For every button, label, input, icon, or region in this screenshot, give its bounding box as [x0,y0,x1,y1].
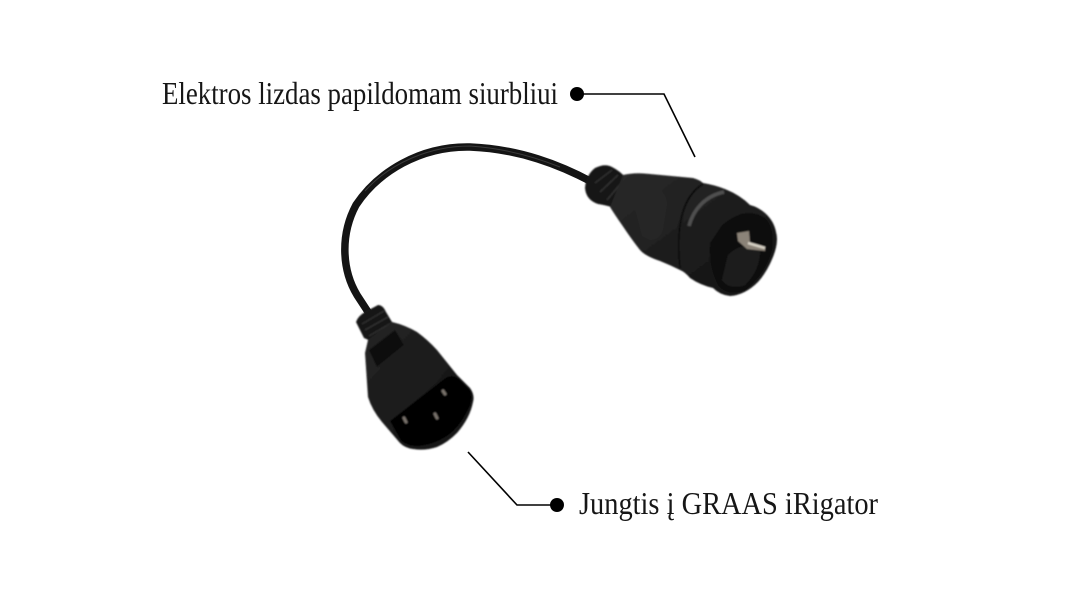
plug face [390,376,472,446]
socket side panel [630,187,667,240]
plug body [365,322,474,450]
plug strain relief [356,305,392,343]
socket strain relief ribs [595,170,622,200]
callout: socket [162,75,695,157]
callout leader: plug [468,452,557,505]
plug connector [356,305,474,450]
callout text: plug: Jungtis į GRAAS iRigator [579,485,878,521]
plug strain relief ribs [362,311,391,336]
plug label recess [369,330,404,367]
callout text: socket: Elektros lizdas papildomam siurbliui [162,75,558,111]
plug pins [404,391,445,422]
socket metal contact [737,231,765,251]
callout marker: socket [570,87,584,101]
socket collar highlight [689,192,724,226]
socket connector [585,165,777,296]
callout marker: plug [550,498,564,512]
socket opening [710,213,773,293]
callout: plug [468,452,878,521]
cable [345,146,592,318]
socket strain relief [585,165,634,208]
callout leader: socket [577,94,695,157]
socket body [610,173,777,296]
